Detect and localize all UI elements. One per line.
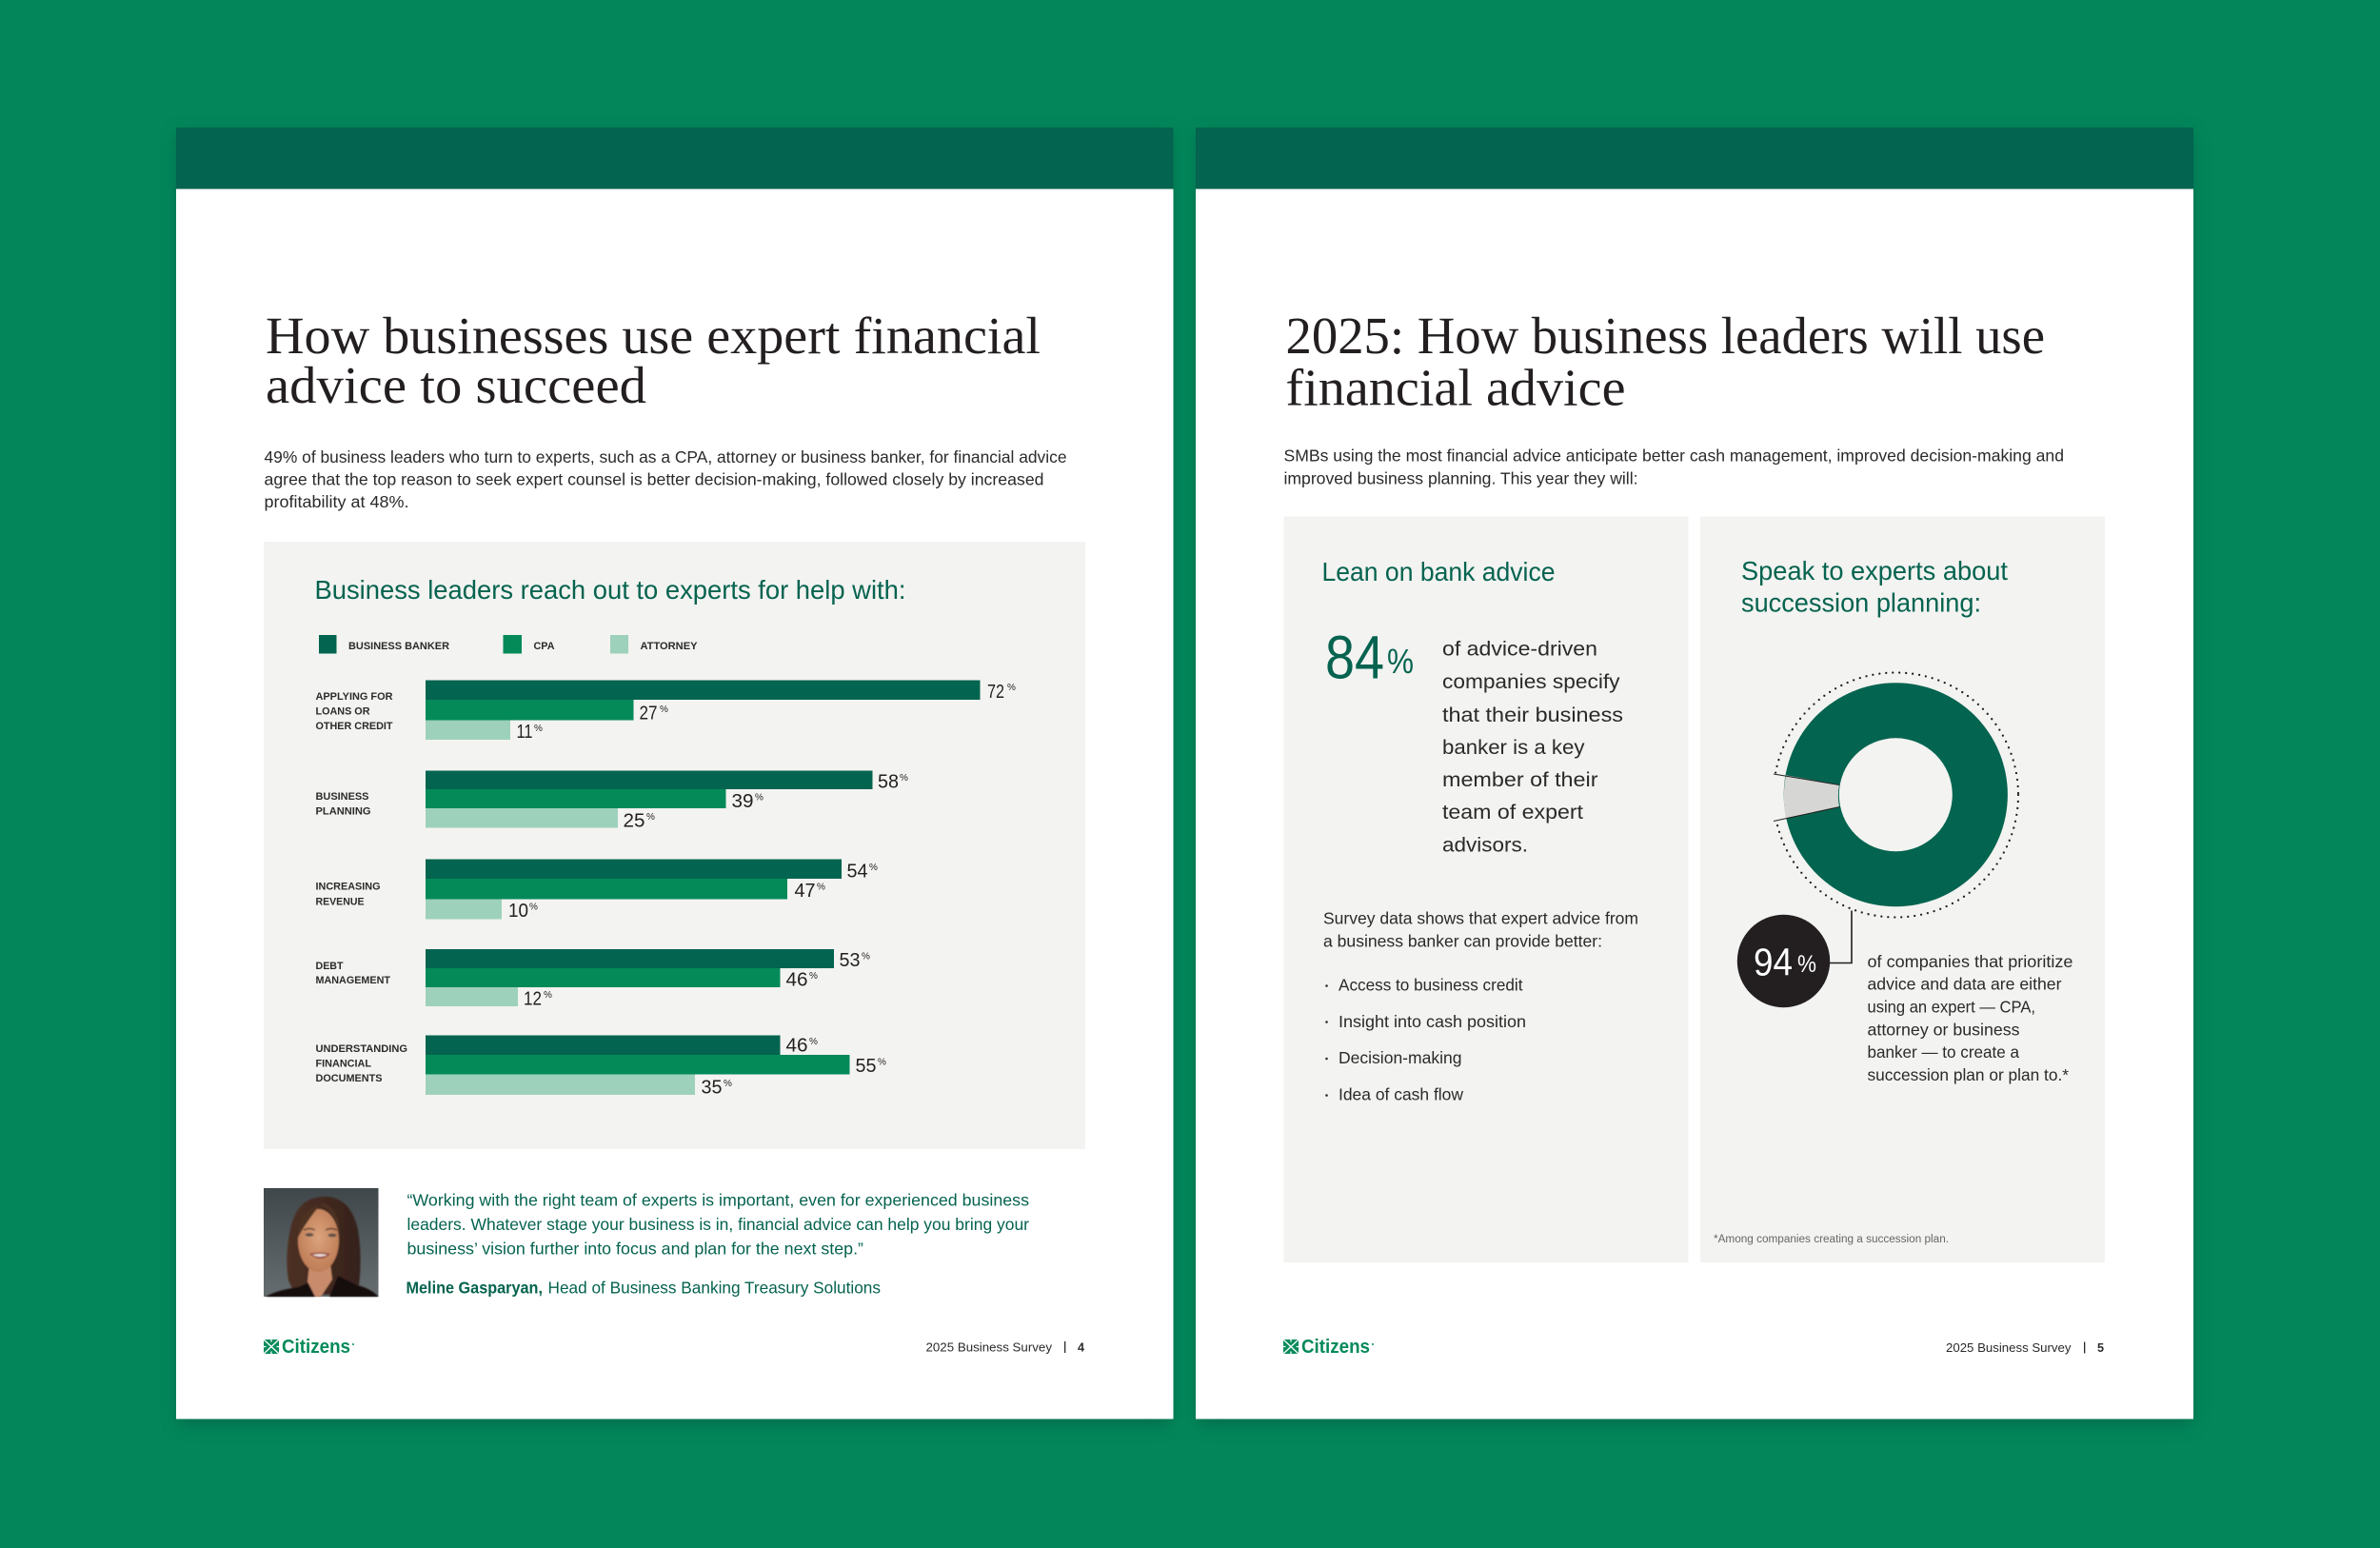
donut chart <box>1769 672 2018 918</box>
bar group: debt management: % <box>862 952 870 962</box>
bar group: applying for loans: OTHER CREDIT <box>316 721 393 732</box>
bar group: understanding financial documents: UNDERSTANDING <box>316 1043 407 1055</box>
bar group: understanding financial documents: FINANCIAL <box>316 1059 371 1070</box>
bullet list <box>1325 975 1526 1104</box>
bar group: business planning: PLANNING <box>316 805 371 817</box>
chart legend: BUSINESS BANKER <box>348 641 449 652</box>
94 percent description: attorney or business <box>1868 1021 2020 1040</box>
page 5 title <box>1285 307 2045 417</box>
bar group: understanding financial documents: 55 <box>855 1056 876 1077</box>
page 4 footer: 2025 Business Survey <box>925 1340 1053 1354</box>
chart legend: CPA <box>533 641 555 652</box>
bar group: increasing revenue: % <box>869 863 878 873</box>
bar group: applying for loans <box>316 680 1016 743</box>
bar group: business planning: 25 <box>623 811 645 832</box>
page 4 header band <box>176 128 1173 189</box>
94 percent description: of companies that prioritize <box>1868 952 2073 971</box>
bar group: applying for loans: LOANS OR <box>316 706 370 718</box>
bar group: debt management: MANAGEMENT <box>316 975 390 986</box>
page 5 intro paragraph: SMBs using the most financial advice anticipate better cash management, improved decision-making and <box>1283 446 2064 465</box>
84 percent description: that their business <box>1442 704 1623 726</box>
left panel heading: Lean on bank advice <box>1321 557 1556 586</box>
bar group: debt management: 46 <box>786 969 807 990</box>
84 percent description: member of their <box>1442 768 1597 791</box>
bar group: debt management: 53 <box>840 950 861 971</box>
bar group: increasing revenue: REVENUE <box>316 897 364 908</box>
bar group: understanding financial documents: 35 <box>701 1078 722 1099</box>
quote text <box>407 1190 1029 1259</box>
bar group: applying for loans: 11 <box>516 722 533 743</box>
page shadows <box>178 133 2192 1424</box>
bar group: understanding financial documents: % <box>724 1079 732 1089</box>
page 5 paper <box>1196 128 2193 1419</box>
page 4 intro paragraph: 49% of business leaders who turn to experts, such as a CPA, attorney or business banker, for financial advice <box>265 447 1066 466</box>
page 5 footer: 5 <box>2097 1340 2104 1355</box>
Citizens logo: Citizens <box>1301 1337 1370 1358</box>
portrait photo <box>264 1188 379 1297</box>
survey data sentence: Survey data shows that expert advice from <box>1323 908 1638 927</box>
bar group: increasing revenue <box>316 859 878 922</box>
right panel heading: Speak to experts about <box>1741 556 2008 585</box>
page 5 header band <box>1196 128 2193 189</box>
page 5 intro paragraph <box>1283 446 2064 487</box>
bar group: business planning <box>316 771 908 832</box>
94 percent description: advice and data are either <box>1868 975 2062 994</box>
bar group: understanding financial documents: % <box>809 1037 818 1047</box>
bar group: understanding financial documents: % <box>878 1057 886 1068</box>
94 percent badge <box>1737 915 1830 1007</box>
bar group: applying for loans: % <box>1007 683 1016 693</box>
bullet list: Access to business credit <box>1339 975 1523 994</box>
94 percent description: using an expert — CPA, <box>1868 998 2035 1017</box>
bar group: business planning: % <box>646 812 655 823</box>
bar group: increasing revenue: 10 <box>508 901 528 922</box>
quote text: “Working with the right team of experts is important, even for experienced business <box>407 1190 1029 1209</box>
bullet list: Insight into cash position <box>1339 1012 1526 1031</box>
panel: succession planning <box>1700 516 2105 1262</box>
bar group: increasing revenue: 47 <box>794 881 815 902</box>
page 4: left page <box>176 128 1173 1419</box>
chart legend <box>319 635 698 653</box>
Citizens logo: Citizens <box>282 1337 350 1358</box>
left panel background <box>1283 516 1689 1262</box>
bullet list: Idea of cash flow <box>1339 1085 1463 1104</box>
84 percent description: team of expert <box>1442 801 1583 824</box>
bar group: debt management: % <box>544 990 552 1001</box>
footnote: *Among companies creating a succession plan. <box>1714 1234 1949 1245</box>
84 percent description: companies specify <box>1442 670 1620 693</box>
quote text: leaders. Whatever stage your business is in, financial advice can help you bring your <box>407 1215 1029 1234</box>
quote attribution: Head of Business Banking Treasury Solutions <box>548 1278 881 1297</box>
bar group: understanding financial documents: DOCUMENTS <box>316 1073 383 1084</box>
connector line <box>1830 910 1852 963</box>
bar group: increasing revenue: % <box>529 903 538 912</box>
panel: bar chart <box>264 542 1085 1149</box>
bar group: business planning: % <box>755 792 764 804</box>
survey data sentence: a business banker can provide better: <box>1323 931 1602 950</box>
84 percent description: advisors. <box>1442 834 1528 857</box>
quote attribution: Meline Gasparyan, <box>406 1278 543 1297</box>
quote attribution <box>406 1278 881 1297</box>
bar group: business planning: 58 <box>878 771 899 792</box>
panel: lean on bank advice <box>1283 516 1689 1262</box>
bar group: business planning: BUSINESS <box>316 791 369 803</box>
bar group: business planning: % <box>900 773 908 784</box>
94 percent description <box>1868 952 2073 1084</box>
page 5: right page <box>1196 128 2193 1419</box>
bar group: applying for loans: APPLYING FOR <box>316 691 393 703</box>
84 percent stat: % <box>1387 642 1414 681</box>
bar group: debt management: DEBT <box>316 961 344 972</box>
page 4 paper <box>176 128 1173 1419</box>
bar group: understanding financial documents: 46 <box>786 1036 807 1057</box>
84 percent stat: 84 <box>1325 623 1384 691</box>
survey data sentence <box>1323 908 1638 950</box>
page 5 title: financial advice <box>1285 358 1626 417</box>
bar group: increasing revenue: INCREASING <box>316 882 381 893</box>
chart heading: Business leaders reach out to experts for help with: <box>314 575 906 605</box>
quote text: business’ vision further into focus and plan for the next step.” <box>407 1240 863 1259</box>
bar group: increasing revenue: 54 <box>847 861 868 882</box>
bullet list: Decision-making <box>1339 1048 1462 1067</box>
page 4 footer: 4 <box>1078 1340 1085 1354</box>
chart legend: ATTORNEY <box>640 641 698 652</box>
bar group: debt management: % <box>809 971 818 982</box>
right panel background <box>1700 516 2105 1262</box>
page 5 title: 2025: How business leaders will use <box>1285 307 2045 365</box>
bar group: applying for loans: % <box>660 705 668 715</box>
bar group: increasing revenue: % <box>817 882 825 893</box>
right panel heading: succession planning: <box>1741 588 1981 617</box>
bar group: business planning: 39 <box>731 791 754 812</box>
bar group: debt management <box>316 949 870 1009</box>
page 4 title: advice to succeed <box>266 356 646 414</box>
page 4 intro paragraph: profitability at 48%. <box>265 492 409 511</box>
84 percent description: of advice-driven <box>1442 638 1597 661</box>
84 percent description <box>1442 638 1623 857</box>
94 percent description: succession plan or plan to.* <box>1868 1065 2069 1084</box>
bar group: applying for loans: 27 <box>640 703 657 724</box>
page 4 title: How businesses use expert financial <box>266 307 1041 365</box>
right panel heading <box>1741 556 2008 617</box>
page 5 intro paragraph: improved business planning. This year they will: <box>1283 468 1637 487</box>
bar group: applying for loans: 72 <box>987 682 1004 703</box>
94 percent description: banker — to create a <box>1868 1042 2019 1062</box>
bar group: understanding financial documents <box>316 1036 886 1099</box>
page 4 intro paragraph <box>265 447 1066 511</box>
page 4 title <box>266 307 1041 414</box>
page 4 intro paragraph: agree that the top reason to seek expert counsel is better decision-making, followed closely by increased <box>265 470 1043 489</box>
page 5 footer: 2025 Business Survey <box>1946 1340 2072 1355</box>
bar group: applying for loans: % <box>534 724 543 734</box>
84 percent description: banker is a key <box>1442 736 1585 759</box>
chart panel background <box>264 542 1085 1149</box>
94 percent badge: 94 <box>1754 941 1793 984</box>
94 percent badge: % <box>1797 951 1816 978</box>
bar group: debt management: 12 <box>524 988 542 1009</box>
